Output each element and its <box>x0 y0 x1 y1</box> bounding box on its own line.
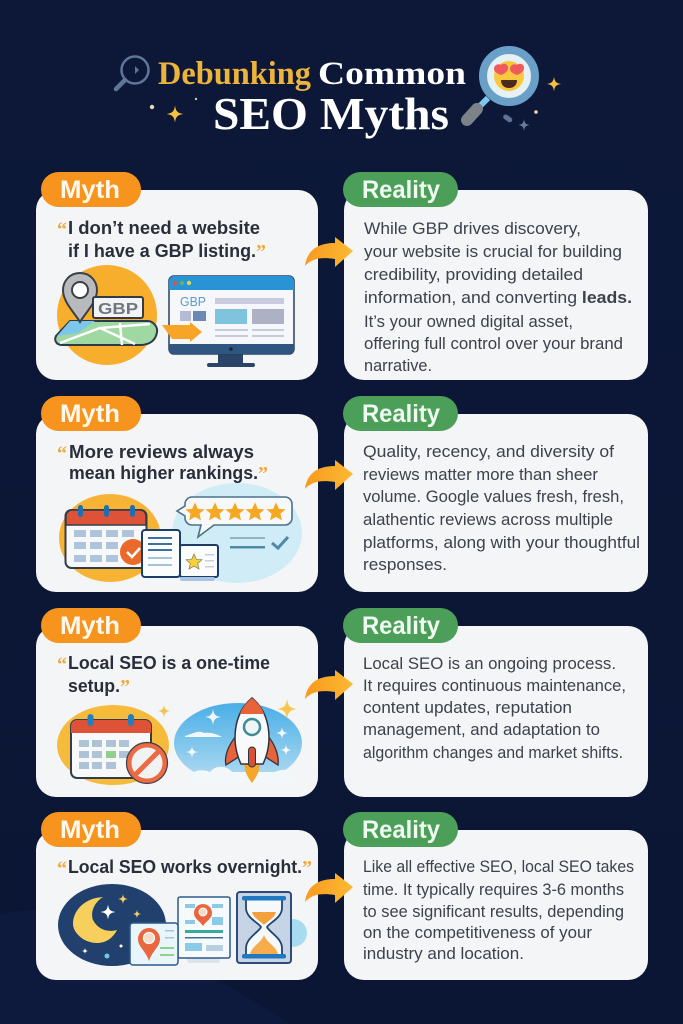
illustration: rocket launching <box>174 698 302 783</box>
myth statement: “ <box>57 219 67 241</box>
reality text: algorithm changes and market shifts. <box>363 744 623 762</box>
reality text: your website is crucial for building <box>364 243 622 261</box>
myth statement: I don’t need a website <box>68 218 260 238</box>
title <box>158 56 466 139</box>
reality text <box>363 858 634 963</box>
arrow 1 <box>305 237 353 267</box>
reality text: narrative. <box>364 357 432 375</box>
reality text: offering full control over your brand <box>364 335 623 353</box>
myth statement <box>57 218 266 263</box>
arrow 2 <box>305 460 353 490</box>
myth statement: Local SEO works overnight. <box>68 857 302 877</box>
panel: reality 2 <box>343 396 648 592</box>
icon: small magnifying glass <box>116 56 148 89</box>
myth label: Myth <box>60 816 120 844</box>
myth label <box>41 396 141 431</box>
arrow 3 <box>305 670 353 700</box>
title: Debunking <box>158 56 311 92</box>
panel: reality 4 <box>343 812 648 980</box>
reality label <box>343 812 458 847</box>
panel: reality 3 <box>343 608 648 797</box>
myth label <box>41 812 141 847</box>
reality label: Reality <box>362 612 440 640</box>
myth statement: ” <box>258 463 268 485</box>
panel: myth 4 <box>36 812 318 980</box>
reality text: volume. Google values fresh, fresh, <box>363 488 624 506</box>
reality text: time. It typically requires 3-6 months <box>363 881 624 899</box>
reality text: It’s your owned digital asset, <box>364 313 573 331</box>
reality text: management, and adaptation to <box>363 721 600 739</box>
illustration: calendar with check <box>59 494 161 582</box>
reality text: Like all effective SEO, local SEO takes <box>363 858 634 876</box>
reality text: to see significant results, depending <box>363 903 624 921</box>
reality label: Reality <box>362 176 440 204</box>
reality text: content updates, reputation <box>363 699 572 717</box>
title: Common <box>318 56 466 92</box>
myth statement: “ <box>57 858 67 880</box>
reality text: It requires continuous maintenance, <box>363 677 626 695</box>
panel: myth 3 <box>36 608 318 797</box>
myth statement: if I have a GBP listing. <box>68 241 256 261</box>
myth statement: “ <box>57 443 67 465</box>
arrow 4 <box>305 873 353 903</box>
illustration: review bubble with five stars <box>172 483 302 583</box>
myth statement <box>57 442 268 485</box>
reality text: Local SEO is an ongoing process. <box>363 655 616 673</box>
myth statement: “ <box>57 654 67 676</box>
myth statement: mean higher rankings. <box>69 463 258 483</box>
reality text: Quality, recency, and diversity of <box>363 443 614 461</box>
illustration: map pin with GBP label: GBP <box>98 301 138 318</box>
reality label <box>343 396 458 431</box>
icon: magnifying glass with heart-eyes emoji <box>467 50 535 120</box>
reality text: responses. <box>363 556 447 574</box>
reality text: platforms, along with your thoughtful <box>363 534 640 552</box>
myth statement: setup. <box>68 676 120 696</box>
panel: reality 1 <box>343 172 648 380</box>
reality text <box>363 443 640 574</box>
myth label: Myth <box>60 400 120 428</box>
illustration: hourglass <box>237 892 307 963</box>
reality text: on the competitiveness of your <box>363 924 593 942</box>
illustration: documents with star <box>142 530 218 581</box>
myth label <box>41 172 141 207</box>
decorative sparkles around title <box>150 77 561 131</box>
myth statement <box>57 653 270 698</box>
myth statement: ” <box>302 857 312 879</box>
myth label: Myth <box>60 612 120 640</box>
illustration: monitor with GBP page <box>169 276 294 367</box>
illustration: calendar with prohibition sign <box>57 704 170 785</box>
reality text: credibility, providing detailed <box>364 266 583 284</box>
reality label: Reality <box>362 816 440 844</box>
myth label <box>41 608 141 643</box>
illustration: map pin with GBP label <box>55 265 157 365</box>
reality text: alathentic reviews across multiple <box>363 511 613 529</box>
reality text <box>363 655 626 762</box>
reality text: reviews matter more than sheer <box>363 466 599 484</box>
illustration: night sky with moon <box>58 884 166 966</box>
reality label <box>343 608 458 643</box>
reality label: Reality <box>362 400 440 428</box>
illustration: monitor with GBP page: GBP <box>180 294 206 309</box>
reality text: industry and location. <box>363 945 524 963</box>
panel: myth 2 <box>36 396 318 592</box>
myth statement: Local SEO is a one-time <box>68 653 270 673</box>
myth statement: More reviews always <box>69 442 254 462</box>
panel: myth 1 <box>36 172 318 380</box>
reality text: While GBP drives discovery, <box>364 220 581 238</box>
myth statement: ” <box>120 676 130 698</box>
reality label <box>343 172 458 207</box>
illustration: orange arrow to monitor <box>162 322 202 342</box>
illustration: cards with map pins <box>130 897 230 965</box>
reality text <box>364 220 632 375</box>
myth statement: ” <box>256 241 266 263</box>
myth label: Myth <box>60 176 120 204</box>
reality text: information, and converting leads. <box>364 289 632 307</box>
title: SEO Myths <box>213 88 449 139</box>
